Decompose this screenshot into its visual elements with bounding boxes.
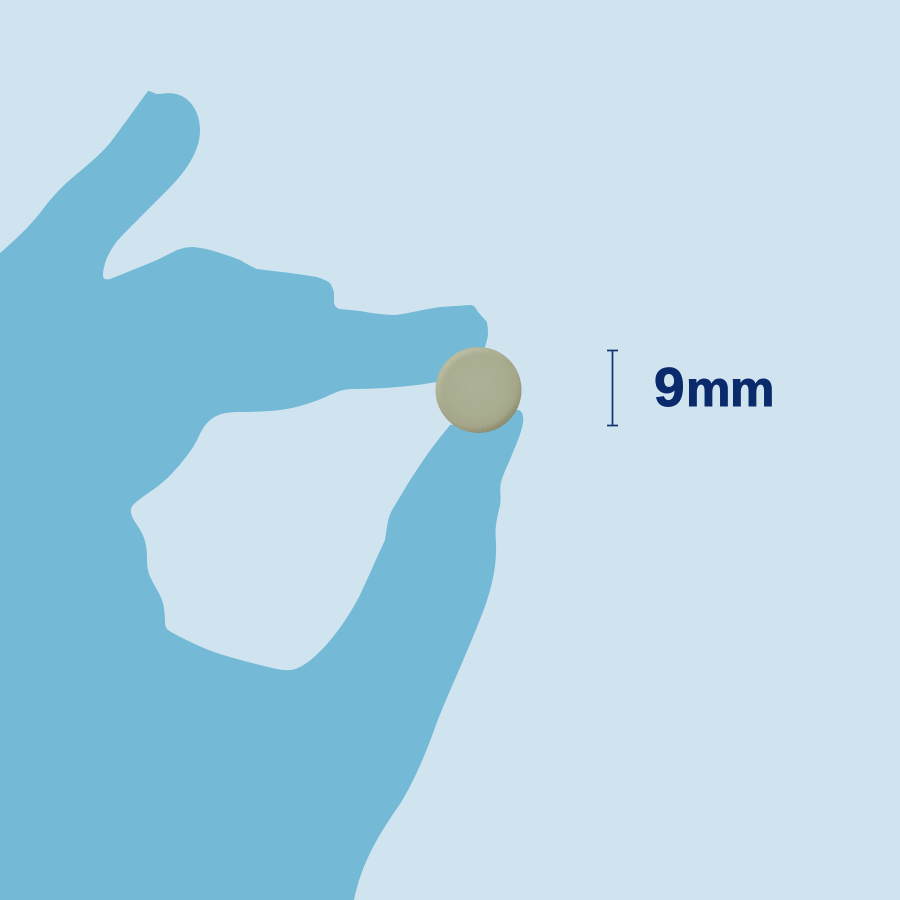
hand silhouette bbox=[0, 91, 523, 900]
size label: m bbox=[730, 361, 774, 417]
size label: 9 bbox=[654, 356, 685, 418]
size label: m bbox=[686, 361, 730, 417]
size bracket bbox=[607, 350, 618, 426]
infographic: tablet size illustration bbox=[0, 91, 772, 900]
tablet bbox=[436, 347, 522, 433]
